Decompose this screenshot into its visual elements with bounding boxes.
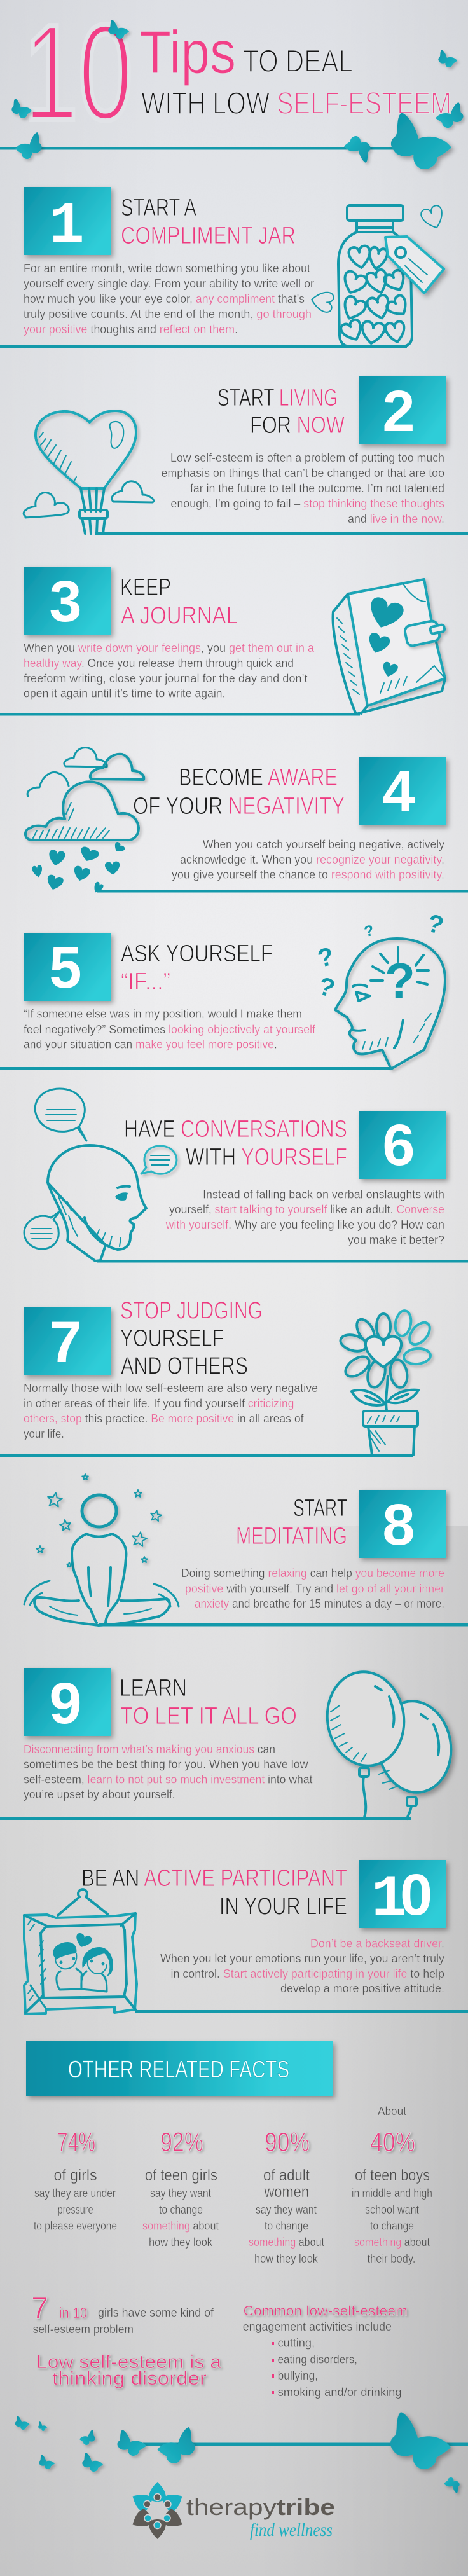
tip 6 number box [359,1111,446,1179]
fact: about 40% of teen boys: About [378,2105,406,2118]
tip 10 heading: BE AN ACTIVE PARTICIPANT [81,1865,347,1892]
fact: 74% of girls: to please everyone [34,2220,117,2233]
fact: about 40% of teen boys: 40% [370,2127,415,2158]
icon: heart hot-air balloon [24,411,154,534]
logo flower mark [128,2482,186,2539]
big butterfly on header rule [391,113,451,169]
question marks: ? [385,953,415,1009]
tip 5 panel [0,909,446,1070]
tip 7 body text: others, stop this practice. Be more positive in all areas of [24,1412,304,1425]
tip 7 panel [0,1297,434,1457]
tip 10 heading: IN YOUR LIFE [219,1894,347,1920]
stat: 7 in 10 girls: 7 [31,2292,48,2325]
tip 9 number box: 9 [49,1671,82,1736]
tip 10 heading [81,1865,347,1920]
list: common low-self-esteem activities: Common low-self-esteem [244,2303,408,2319]
tip 9 divider [0,1817,411,1820]
tip 2 number box: 2 [382,379,415,444]
callout: low self-esteem is a thinking disorder: Low self-esteem is a [36,2352,221,2373]
tip 1 heading: START A [121,195,197,221]
tip 8 heading: START [293,1495,347,1522]
tip 6 body text [165,1188,444,1246]
tip 3 heading [120,574,238,630]
tip 8 body text: Doing something relaxing can help you become more [181,1567,444,1580]
tip 7 number box: 7 [49,1310,82,1375]
tip 3 body text: When you write down your feelings, you get them out in a [24,642,315,654]
facts columns [34,2105,432,2265]
tip 2 heading [217,385,345,439]
fact: 92% of teen girls: to change [159,2203,203,2216]
tip 4 body text: acknowledge it. When you recognize your negativity, [180,853,444,866]
tip 1 heading: COMPLIMENT JAR [121,223,296,249]
tip 2 panel [24,376,468,535]
tip 4 heading [133,764,345,820]
stat: 7 in 10 girls: self-esteem problem [33,2323,134,2336]
tip 5 body text: and your situation can make you feel more positive. [24,1038,277,1050]
tip 5 heading [121,940,273,995]
tip 7 heading: YOURSELF [120,1325,224,1352]
tip 2 heading: START LIVING [217,385,338,411]
list: common low-self-esteem activities: bullying, [278,2369,318,2382]
other related facts banner [26,2041,333,2096]
tip 1 panel [0,187,446,348]
tip 3 body text: freeform writing, close your journal for the day and don’t [24,672,307,685]
tip 4 heading: BECOME AWARE [179,764,338,791]
tip 9 number box [24,1668,111,1736]
tip 3 panel [0,567,445,716]
tip 10 body text [160,1937,444,1995]
tip 1 divider [0,345,407,348]
tip 7 number box [24,1307,111,1375]
tip 7 body text: Normally those with low self-esteem are also very negative [24,1382,318,1395]
tip 6 body text: yourself, start talking to yourself like an adult. Converse [169,1203,444,1216]
fact: 92% of teen girls: of teen girls [145,2166,217,2184]
logo wordmark: therapy tribe [186,2494,335,2520]
tip 3 number box [24,567,111,635]
tip 2 number box [359,376,446,444]
fact: 90% of adult women: to change [265,2220,308,2233]
fact: 92% of teen girls: how they look [149,2236,213,2249]
fact: 90% of adult women: of adult [263,2166,310,2184]
tip 1 heading [121,195,296,249]
fact: about 40% of teen boys: something about [354,2236,430,2249]
fact: 90% of adult women: say they want [256,2203,317,2216]
tip 10 body text: develop a more positive attitude. [280,1982,444,1995]
tip 2 body text: far in the future to tell the outcome. I’m not talented [190,482,444,495]
tip 7 body text: your life. [24,1428,64,1440]
tip 9 body text: Disconnecting from what’s making you anxious can [24,1743,275,1756]
tip 5 heading: “IF...” [121,968,170,995]
fact: 74% of girls: say they are under [34,2187,116,2200]
icon: two balloons [321,1667,457,1819]
tip 9 panel [0,1667,457,1820]
icon: heart flower in pot [339,1309,434,1455]
list: common low-self-esteem activities: smoking and/or drinking [278,2386,402,2399]
tip 7 divider [0,1454,413,1457]
tip 2 body text: enough, I’m going to fail – stop thinking these thoughts [170,497,444,510]
stat: 7 in 10 girls: in 10 [59,2304,87,2321]
tip 6 body text: with yourself. Why are you feeling like you do? How can [165,1218,444,1231]
logo tagline: find wellness [250,2519,333,2540]
tip 10 panel [24,1860,468,2014]
fact: about 40% of teen boys: their body. [368,2252,416,2265]
tip 9 heading [120,1675,297,1730]
tip 1 number box: 1 [49,193,85,259]
icon: rain cloud with hearts [25,748,144,895]
fact: 92% of teen girls: something about [142,2220,219,2233]
fact: about 40% of teen boys: to change [370,2220,414,2233]
tip 2 body text: and live in the now. [348,513,444,525]
tip 4 body text [172,838,444,881]
question marks: ? [315,972,338,1003]
tip 8 body text: anxiety and breathe for 15 minutes a day – or more. [195,1597,444,1610]
fact: 74% of girls: of girls [53,2166,97,2184]
title: Tips: Tips [139,18,236,86]
tip 4 body text: you give yourself the chance to respond with positivity. [172,869,444,881]
tip 9 heading: LEARN [120,1675,187,1702]
tip 4 divider [97,890,468,893]
fact: 90% of adult women: women [264,2183,309,2201]
other related facts banner: OTHER RELATED FACTS [68,2056,289,2083]
tip 7 body text [24,1382,318,1440]
fact: 90% of adult women: 90% [265,2127,310,2158]
list: common low-self-esteem activities: engagement activities include [243,2320,392,2333]
header rule [0,147,407,150]
fact: 92% of teen girls: say they want [150,2187,211,2200]
fact: about 40% of teen boys [352,2105,432,2265]
small hearts beside jar [310,204,446,313]
tip 4 number box [359,757,446,825]
question marks [315,909,446,1009]
tip 9 heading: TO LET IT ALL GO [120,1703,297,1730]
tip 5 divider [0,1067,392,1070]
tip 6 body text: you make it better? [348,1234,444,1246]
tip 5 body text [24,1007,316,1050]
tip 10 body text: in control. Start actively participating in your life to help [170,1967,444,1980]
tip 5 body text: “If someone else was in my position, would I make them [24,1007,302,1020]
footer rule and butterflies [15,2412,468,2493]
stat: 7 in 10 girls [31,2292,214,2336]
tip 8 body text [181,1567,444,1610]
fact: 74% of girls [34,2127,117,2233]
question marks: ? [424,909,446,940]
title: to deal: TO DEAL [243,43,353,79]
icon: picture frame with couple [24,1889,137,2014]
icon: meditating person with stars [24,1474,179,1625]
question marks: ? [362,922,375,940]
fact: about 40% of teen boys: school want [365,2203,419,2216]
tip 7 heading [120,1297,263,1380]
icon: head with speech bubbles [24,1089,177,1261]
tip 5 number box: 5 [49,935,82,1000]
icon: journal with hearts [333,579,445,714]
tip 1 body text: how much you like your eye color, any compliment that’s [24,293,305,305]
jar label tag [385,237,444,293]
tip 6 number box: 6 [382,1113,415,1178]
question marks: ? [315,942,336,973]
tip 4 heading: OF YOUR NEGATIVITY [133,793,345,820]
tip 8 divider [99,1623,468,1627]
tip 3 body text: healthy way. Once you release them through quick and [24,657,294,670]
tip 2 body text: Low self-esteem is often a problem of putting too much [170,451,444,464]
tip 10 number box: 1 [371,1866,406,1932]
tip 1 body text: yourself every single day. From your ability to write well or [24,277,314,290]
tip 2 body text: emphasis on things that can’t be changed or that are too [162,467,444,479]
fact: 90% of adult women: something about [249,2236,324,2249]
fact: 92% of teen girls [142,2127,219,2249]
tip 5 body text: feel negatively?” Sometimes looking objectively at yourself [24,1023,316,1036]
tip 10 body text: When you let your emotions run your life, you aren’t truly [160,1952,444,1965]
fact: 74% of girls: 74% [57,2127,95,2158]
tip 4 number box: 4 [382,759,415,824]
tip 9 body text: self-esteem, learn to not put so much investment into what [24,1773,313,1786]
fact: about 40% of teen boys: in middle and high [352,2187,432,2200]
tip 6 heading: WITH YOURSELF [186,1144,347,1171]
tip 1 body text: truly positive counts. At the end of the month, go through [24,308,312,320]
tip 10 body text: Don’t be a backseat driver. [310,1937,444,1950]
tip 7 heading: AND OTHERS [121,1353,248,1380]
tip 3 divider [0,713,360,716]
callout: low self-esteem is a thinking disorder [36,2352,221,2389]
tip 10 divider [135,2010,468,2013]
tip 4 panel [25,748,468,895]
tip 3 heading: KEEP [120,574,171,601]
list: common low-self-esteem activities: cutting, [278,2337,315,2350]
title: big number 10: 10 [24,0,133,149]
tip 9 body text: sometimes be the best thing for you. When you have low [24,1758,308,1770]
tip 2 body text [162,451,444,525]
fact: about 40% of teen boys: of teen boys [355,2166,430,2184]
icon: jar of hearts [310,204,446,347]
tip 6 panel [24,1089,468,1263]
header: title and butterflies [0,0,464,169]
callout: low self-esteem is a thinking disorder: thinking disorder [52,2368,207,2389]
fact: 92% of teen girls: 92% [160,2127,203,2158]
couple portrait [53,1942,113,1976]
butterflies around title [11,20,464,163]
tip 6 heading: HAVE CONVERSATIONS [124,1116,347,1143]
tip 8 number box: 8 [382,1492,415,1557]
tip 1 body text [24,262,314,336]
list: common low-self-esteem activities: eating disorders, [278,2353,357,2366]
tip 5 heading: ASK YOURSELF [121,940,273,967]
tip 3 heading: A JOURNAL [121,603,238,630]
tip 6 divider [97,1260,468,1263]
tip 6 heading [124,1116,347,1171]
stat: 7 in 10 girls: girls have some kind of [98,2306,214,2319]
logo: therapy tribe [128,2482,335,2540]
tip 8 body text: positive with yourself. Try and let go of all your inner [185,1582,444,1595]
fact: 90% of adult women: how they look [254,2252,319,2265]
tip 9 body text [24,1743,313,1801]
tip 5 number box [24,933,111,1001]
tip 8 heading: MEDITATING [236,1523,347,1550]
tip 7 heading: STOP JUDGING [120,1297,263,1324]
tip 7 body text: in other areas of their life. If you find yourself criticizing [24,1397,294,1410]
tip 8 heading [236,1495,347,1550]
tip 4 body text: When you catch yourself being negative, actively [203,838,444,851]
tip 3 body text: open it again until it’s time to write again. [24,687,225,699]
tip 3 body text [24,642,315,699]
list: common low-self-esteem activities [243,2303,408,2399]
tip 8 number box [359,1490,446,1558]
tip 1 body text: For an entire month, write down something you like about [24,262,310,275]
tip 9 body text: you’re upset by about yourself. [24,1788,176,1801]
fact: 90% of adult women [249,2127,324,2265]
tip 8 panel [24,1474,468,1627]
tip 10 number box: 0 [400,1863,432,1927]
tip 6 body text: Instead of falling back on verbal onslaughts with [203,1188,444,1201]
tip 2 heading: FOR NOW [250,412,345,439]
icon: head with question marks [315,909,446,1069]
tip 3 number box: 3 [49,569,82,634]
fact: 74% of girls: pressure [58,2203,93,2216]
tip 1 number box [24,187,111,259]
tip 2 divider [95,532,468,535]
tip 10 number box [359,1860,446,1932]
tip 1 body text: your positive thoughts and reflect on them. [24,323,238,336]
